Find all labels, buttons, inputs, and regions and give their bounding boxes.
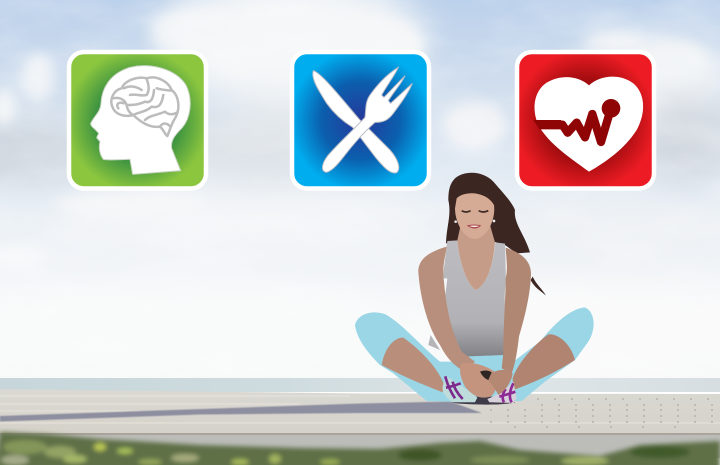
grass foreground <box>0 432 720 465</box>
hands <box>460 363 513 398</box>
fork <box>322 67 412 172</box>
head silhouette <box>91 66 190 174</box>
heart <box>535 77 643 172</box>
woman stretching <box>355 173 594 405</box>
chest and neck <box>457 225 495 290</box>
sea horizon <box>0 378 720 392</box>
icon: heart with heartbeat on red tile <box>517 52 654 188</box>
icon: brain in head on green tile <box>69 52 206 188</box>
hair <box>446 173 546 296</box>
brain <box>111 77 178 136</box>
arms <box>418 247 531 373</box>
icon: knife and fork on blue tile <box>292 52 429 188</box>
head and face <box>454 193 495 239</box>
tank top <box>428 240 512 365</box>
shoes <box>443 376 517 405</box>
heartbeat line <box>533 99 620 142</box>
legs and leggings <box>355 307 594 402</box>
knife <box>313 71 399 173</box>
pavement and shadow <box>0 389 720 458</box>
